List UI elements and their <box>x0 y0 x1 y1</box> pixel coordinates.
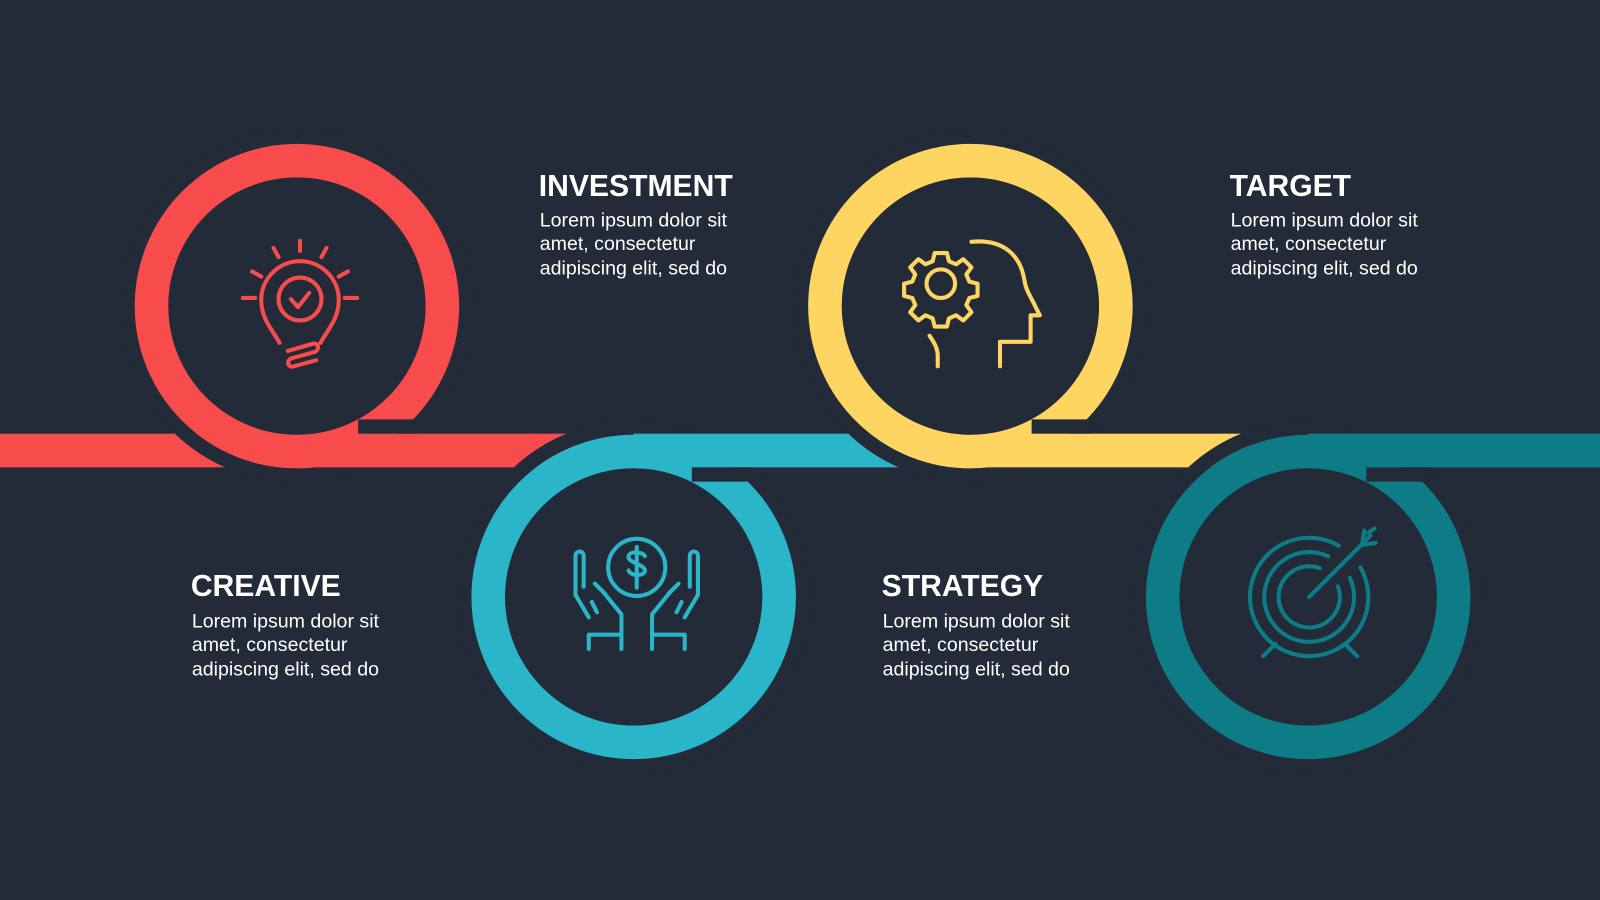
icon: light bulb <box>243 241 357 367</box>
loop: teal target <box>1139 428 1600 766</box>
icon: target <box>1250 529 1376 656</box>
icon: hands with coin <box>576 539 698 649</box>
icon: gear head <box>904 241 1040 366</box>
text: investment: INVESTMENT <box>539 170 733 203</box>
loop: red creative <box>0 137 577 476</box>
text: strategy: STRATEGY <box>882 570 1043 603</box>
text: creative: adipiscing elit, sed do <box>192 659 379 681</box>
text: strategy <box>882 570 1070 681</box>
text: creative: CREATIVE <box>191 570 341 603</box>
text: creative <box>191 570 380 681</box>
text: investment: Lorem ipsum dolor sit <box>540 210 728 232</box>
text: investment: amet, consectetur <box>540 233 696 255</box>
text: strategy: Lorem ipsum dolor sit <box>883 611 1070 633</box>
text: strategy: amet, consectetur <box>883 634 1039 656</box>
text: target: adipiscing elit, sed do <box>1231 257 1418 279</box>
loop: cyan investment <box>464 428 960 766</box>
text: creative: amet, consectetur <box>192 634 348 656</box>
text: strategy: adipiscing elit, sed do <box>883 659 1070 681</box>
text: target: Lorem ipsum dolor sit <box>1231 210 1418 232</box>
text: target: amet, consectetur <box>1231 233 1387 255</box>
text: investment <box>539 170 733 279</box>
text: target <box>1230 170 1418 279</box>
text: investment: adipiscing elit, sed do <box>540 257 727 279</box>
text: target: TARGET <box>1230 170 1352 203</box>
loop: yellow strategy <box>801 137 1251 476</box>
text: creative: Lorem ipsum dolor sit <box>192 611 380 633</box>
